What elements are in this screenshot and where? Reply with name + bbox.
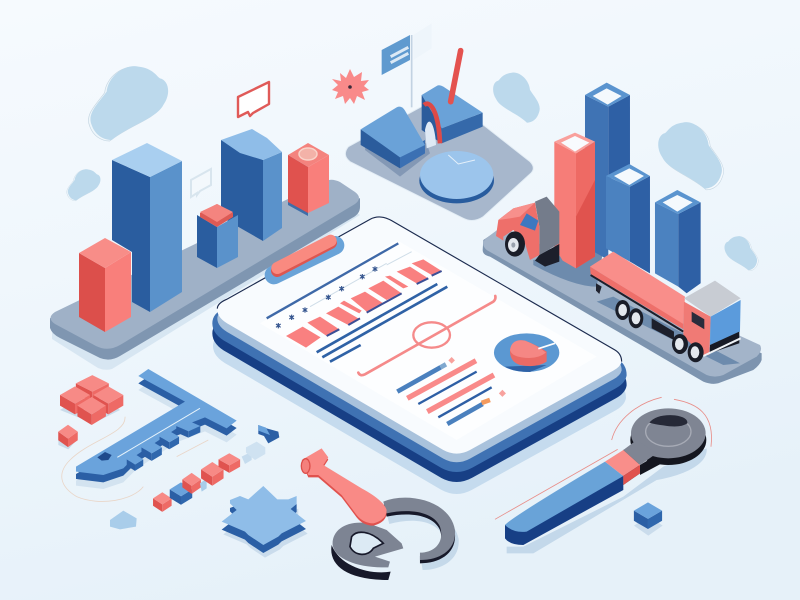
red box with disc top — [288, 143, 329, 216]
red accent arcs — [495, 397, 712, 519]
panel: top centre platform — [345, 23, 533, 220]
icon: red speech bubble — [238, 82, 269, 117]
large truck — [590, 252, 741, 362]
tall blue bar — [112, 143, 182, 312]
pink slider — [358, 296, 495, 375]
icon: red wrench handle — [301, 448, 387, 526]
icon: chain of small cubes — [153, 425, 279, 512]
pink column strips — [286, 259, 442, 348]
icon: small cloud right — [724, 236, 758, 271]
panel: left bar chart platform — [50, 129, 360, 370]
blue bar with torn top — [221, 129, 282, 241]
blue bar right — [655, 190, 701, 293]
wrench handle — [505, 450, 640, 545]
small truck — [496, 197, 559, 267]
icon: white speech bubble — [191, 169, 211, 197]
horizontal bars — [397, 357, 506, 424]
timeline with markers — [267, 243, 412, 328]
bottom left tools — [58, 369, 459, 580]
red bar small — [79, 238, 131, 332]
icon: cloud top right of centre — [493, 72, 540, 123]
disc — [419, 151, 494, 203]
icon: caliper ruler — [76, 369, 237, 489]
icon: small cloud left — [67, 169, 100, 201]
clip button — [274, 241, 335, 275]
right block — [422, 85, 483, 143]
wrench shadow — [507, 448, 707, 553]
icon: red starburst — [332, 69, 369, 104]
pie chart — [494, 333, 559, 372]
blue bar middle — [606, 164, 650, 273]
left block — [361, 107, 430, 177]
decorative tan outline — [62, 417, 208, 501]
clouds — [67, 66, 758, 271]
icon: flag — [382, 23, 432, 107]
red bar — [554, 133, 595, 268]
bar shadow — [533, 250, 740, 365]
icon: large cloud left — [88, 66, 168, 141]
wrench head — [623, 408, 706, 485]
icon: cloud right — [658, 122, 724, 190]
icon: light small block — [110, 511, 137, 529]
bottom right wrench — [495, 397, 712, 553]
icon: small blue cube — [634, 502, 663, 536]
panel: right truck platform — [483, 83, 762, 384]
icon: red cube cluster — [60, 375, 123, 425]
icon: gear star — [222, 486, 308, 558]
panel: central tablet — [217, 217, 622, 490]
red arch with crystal — [424, 104, 440, 148]
icon: grey spanner ring — [331, 498, 459, 580]
short blue bar with red cap — [197, 204, 238, 268]
red pointer — [451, 51, 461, 102]
blue text lines — [317, 284, 447, 362]
blue bar back — [585, 83, 630, 260]
icon: small red cube — [58, 425, 78, 449]
